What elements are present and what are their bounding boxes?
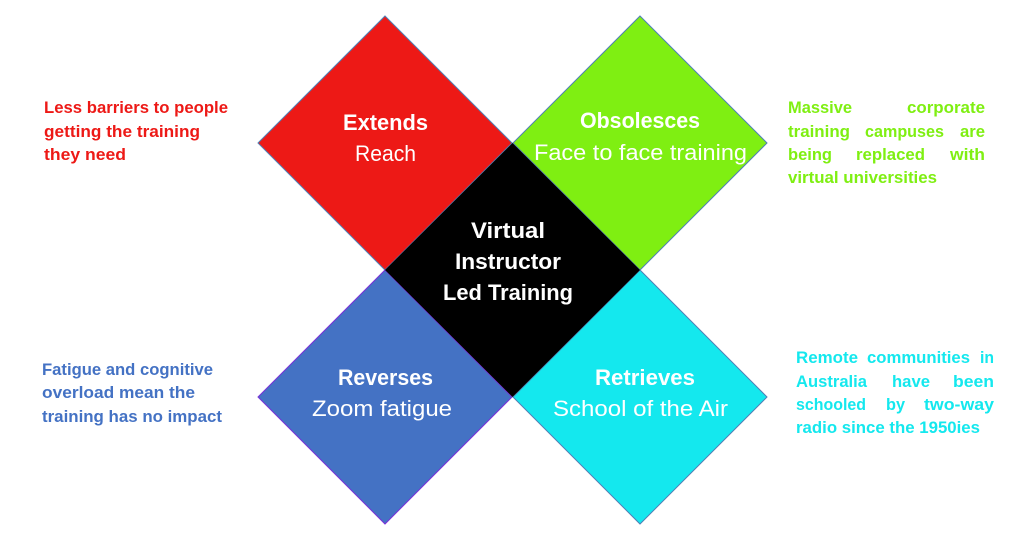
text block: obsolesces note: training — [788, 122, 850, 141]
label: Face to face training: Face to face training — [534, 140, 747, 165]
text block: retrieves note: been — [953, 372, 994, 391]
heading: Virtual Instructor Led Training: Virtual — [471, 218, 545, 243]
text block: retrieves note — [796, 348, 995, 437]
label: School of the Air: School of the Air — [553, 396, 728, 421]
text block: retrieves note: by — [886, 395, 906, 414]
heading: Retrieves: Retrieves — [595, 365, 695, 390]
text block: retrieves note: two-way — [924, 395, 995, 414]
heading: Virtual Instructor Led Training: Led Training — [443, 280, 573, 305]
text block: retrieves note: radio since the 1950ies — [796, 418, 980, 437]
text block: obsolesces note: corporate — [907, 98, 985, 117]
panel: reverses (blue diamond) — [258, 270, 512, 524]
text block: reverses note: overload mean the — [42, 383, 195, 402]
text block: retrieves note: Australia — [796, 372, 868, 391]
panel: extends (red diamond) — [258, 16, 512, 270]
text block: obsolesces note: campuses — [865, 122, 944, 141]
panel: centre (black diamond) — [385, 143, 640, 397]
text block: retrieves note: schooled — [796, 395, 866, 414]
text block: reverses note: Fatigue and cognitive — [42, 360, 213, 379]
text block: obsolesces note: virtual universities — [788, 168, 937, 187]
text block: retrieves note: Remote — [796, 348, 858, 367]
text block: retrieves note: in — [980, 348, 994, 367]
heading: Reverses: Reverses — [338, 365, 433, 390]
text block: extends note: Less barriers to people — [44, 98, 228, 117]
heading: Obsolesces: Obsolesces — [580, 108, 700, 133]
label: Zoom fatigue: Zoom fatigue — [312, 396, 452, 421]
label: Reach: Reach — [355, 141, 416, 166]
text block: reverses note: training has no impact — [42, 407, 222, 426]
text block: retrieves note: have — [892, 372, 930, 391]
text block: extends note: getting the training — [44, 122, 200, 141]
text block: obsolesces note — [788, 98, 985, 187]
text block: reverses note — [42, 360, 222, 426]
text block: extends note — [44, 98, 228, 164]
panel: obsolesces (green diamond) — [513, 16, 767, 270]
heading: Virtual Instructor Led Training: Instructor — [455, 249, 561, 274]
text block: obsolesces note: with — [949, 145, 985, 164]
heading: Extends: Extends — [343, 110, 428, 135]
text block: retrieves note: communities — [867, 348, 970, 367]
text block: obsolesces note: replaced — [856, 145, 925, 164]
text block: obsolesces note: are — [960, 122, 985, 141]
text block: obsolesces note: being — [788, 145, 832, 164]
text block: extends note: they need — [44, 145, 126, 164]
text block: obsolesces note: Massive — [788, 98, 852, 117]
heading: Virtual Instructor Led Training — [443, 218, 573, 305]
panel: retrieves (cyan diamond) — [513, 270, 767, 524]
